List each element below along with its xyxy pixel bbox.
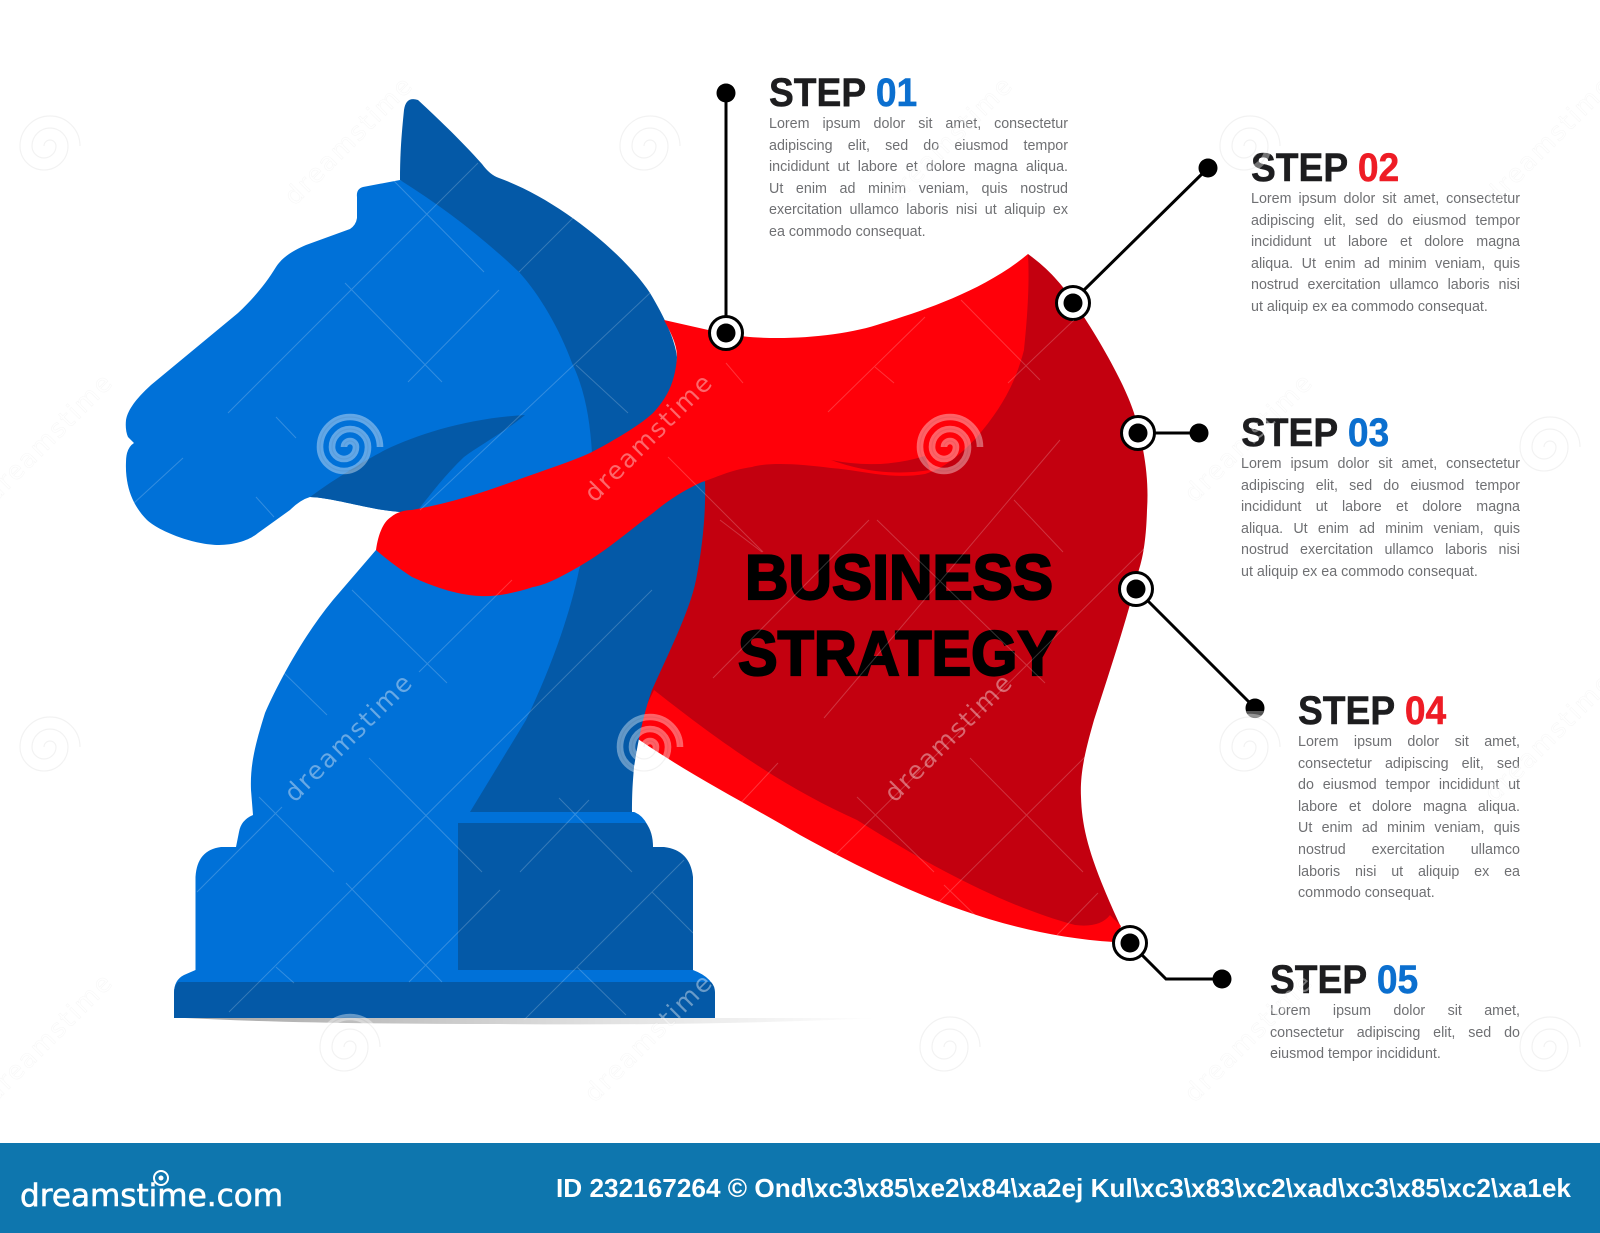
watermark: dreamstime text: dreamstime [1178, 968, 1318, 1108]
watermark: spirals fill [20, 116, 1580, 1071]
step 04 heading: STEP 04 [1298, 689, 1446, 733]
footer bar [0, 1143, 1600, 1233]
connector: step 04 [1120, 572, 1264, 718]
watermark: dreamstime text: dreamstime [278, 71, 418, 211]
watermark: dreamstime text: dreamstime [578, 368, 718, 508]
scarf: small fold [831, 456, 930, 472]
knight: pedestal shadow [458, 823, 693, 970]
step 02 heading: STEP 02 [1251, 146, 1399, 190]
title: business strategy: STRATEGY [738, 619, 1057, 689]
step 04 body: laboris nisi ut aliquip ex ea [1298, 864, 1520, 880]
step 03 body [1241, 456, 1520, 580]
watermark: dreamstime text: dreamstime [278, 668, 418, 808]
watermark: spirals faint outline [20, 116, 1580, 1071]
step 02 text block [1251, 146, 1520, 315]
step 03 body: ut aliquip ex ea commodo consequat. [1241, 564, 1478, 580]
step 05 body: consectetur adipiscing elit, sed do [1270, 1025, 1520, 1041]
step 02 body: adipiscing elit, sed do eiusmod tempor [1251, 213, 1520, 229]
watermark: dreamstime text: dreamstime [1178, 368, 1318, 508]
step 01 text block [769, 71, 1068, 240]
step 05 text block [1270, 958, 1520, 1062]
step 04 body: do eiusmod tempor incididunt ut [1298, 777, 1520, 793]
title: business strategy: BUSINESS [745, 543, 1053, 613]
step 04 body: Ut enim ad minim veniam, quis [1298, 820, 1520, 836]
watermark: dreamstime text: dreamstime [578, 968, 718, 1108]
knight: ear and mane shadow [400, 99, 677, 475]
step 03 heading: STEP 03 [1241, 411, 1389, 455]
step 05 heading: STEP 05 [1270, 958, 1418, 1002]
step 02 body: nostrud exercitation ullamco laboris nisi [1251, 277, 1520, 293]
step 02 body [1251, 191, 1520, 315]
connector: step 05 [1114, 926, 1232, 988]
step 01 body: Lorem ipsum dolor sit amet, consectetur [769, 116, 1068, 132]
step 03 body: Lorem ipsum dolor sit amet, consectetur [1241, 456, 1520, 472]
knight: collar band [470, 812, 653, 847]
step 04 text block [1298, 689, 1520, 901]
step 02 body: Lorem ipsum dolor sit amet, consectetur [1251, 191, 1520, 207]
step 04 body: consectetur adipiscing elit, sed [1298, 756, 1520, 772]
step 01 body: adipiscing elit, sed do eiusmod tempor [769, 138, 1068, 154]
step 03 body: incididunt ut labore et dolore magna [1241, 499, 1520, 515]
step 04 body: Lorem ipsum dolor sit amet, [1298, 734, 1520, 750]
watermark: hairlines [134, 163, 1146, 1020]
connector: step 03 [1122, 416, 1208, 450]
step 04 body: nostrud exercitation ullamco [1298, 842, 1520, 858]
knight: chin shadow [310, 415, 525, 512]
footer credit: ID 232167264 © Ond\xc3\x85\xe2\x84\xa2ej Kul\xc3\x83\xc2\xad\xc3\x85\xc2\xa1ek [556, 1173, 1572, 1203]
step 04 body: labore et dolore magna aliqua. [1298, 799, 1520, 815]
step 02 body: ut aliquip ex ea commodo consequat. [1251, 299, 1488, 315]
knight: light blue silhouette [126, 180, 715, 1018]
scarf: bright red band around the neck [376, 254, 1029, 596]
step 01 heading: STEP 01 [769, 71, 917, 115]
watermark: dreamstime text: dreamstime [878, 71, 1018, 211]
connector: step 02 [1056, 158, 1218, 320]
step 05 body: eiusmod tempor incididunt. [1270, 1046, 1441, 1062]
cape: dark red body [640, 254, 1147, 932]
connector: step 01 [710, 84, 742, 350]
step 01 body: Ut enim ad minim veniam, quis nostrud [769, 181, 1068, 197]
ground shadow [185, 1018, 880, 1024]
step 03 body: aliqua. Ut enim ad minim veniam, quis [1241, 521, 1520, 537]
step 03 body: nostrud exercitation ullamco laboris nisi [1241, 542, 1520, 558]
step 05 body [1270, 1003, 1520, 1062]
watermark: dreamstime text: dreamstime [878, 668, 1018, 808]
cape: bright lower hem [632, 690, 1121, 942]
step 01 body: exercitation ullamco laboris nisi ut aliquip ex [769, 202, 1068, 218]
step 02 body: incididunt ut labore et dolore magna [1251, 234, 1520, 250]
step 01 body [769, 116, 1068, 240]
footer logo: dreamstime.com [20, 1178, 283, 1214]
step 01 body: ea commodo consequat. [769, 224, 926, 240]
knight: neck shadow [470, 480, 705, 812]
knight: base plate [174, 982, 715, 1018]
step 01 body: incididunt ut labore et dolore magna aliqua. [769, 159, 1068, 175]
step 04 body: commodo consequat. [1298, 885, 1435, 901]
step 05 body: Lorem ipsum dolor sit amet, [1270, 1003, 1520, 1019]
step 04 body [1298, 734, 1520, 901]
step 02 body: aliqua. Ut enim ad minim veniam, quis [1251, 256, 1520, 272]
step 03 body: adipiscing elit, sed do eiusmod tempor [1241, 478, 1520, 494]
title: business strategy [738, 543, 1057, 689]
step 03 text block [1241, 411, 1520, 580]
